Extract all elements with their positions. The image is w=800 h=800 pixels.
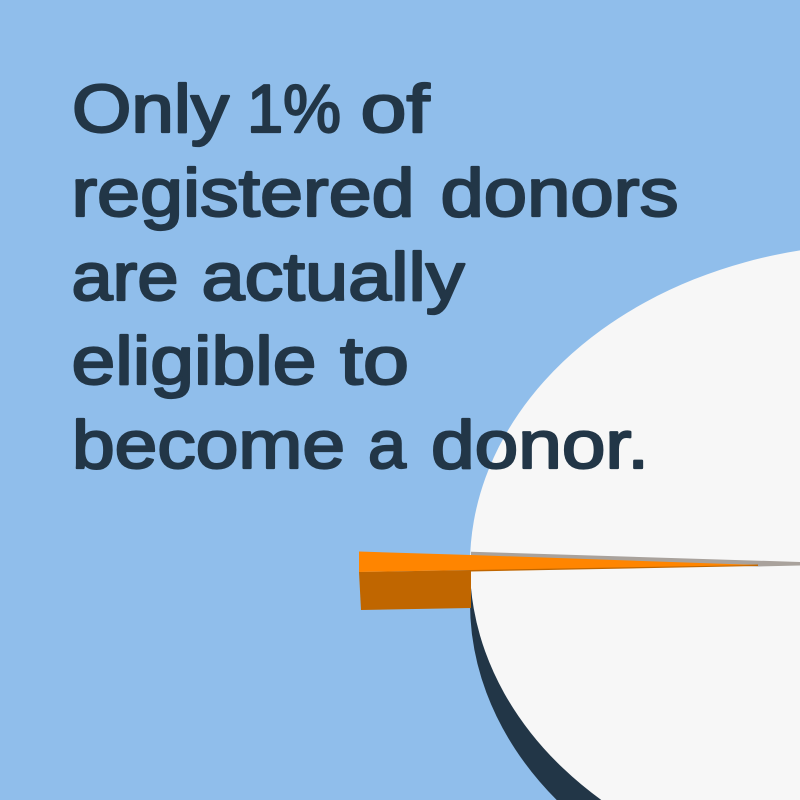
headline: are [72, 239, 178, 315]
headline: registered [72, 155, 414, 231]
headline: of [360, 71, 430, 147]
extruded slice side [359, 570, 471, 610]
headline: donor. [431, 407, 649, 483]
headline: Only [72, 71, 229, 147]
grey wedge [471, 552, 800, 566]
orange 1% slice [359, 552, 758, 572]
pie chart depth edge [470, 573, 800, 800]
headline: to [340, 323, 409, 399]
pie chart top [470, 250, 800, 800]
headline: become [72, 407, 345, 483]
headline: donors [440, 155, 678, 231]
headline: actually [202, 239, 464, 315]
headline: 1% [247, 71, 341, 147]
dark underside of slice [471, 564, 758, 572]
headline: eligible [72, 323, 316, 399]
headline: a [368, 407, 406, 483]
headline [72, 71, 678, 483]
pie chart [359, 250, 800, 800]
